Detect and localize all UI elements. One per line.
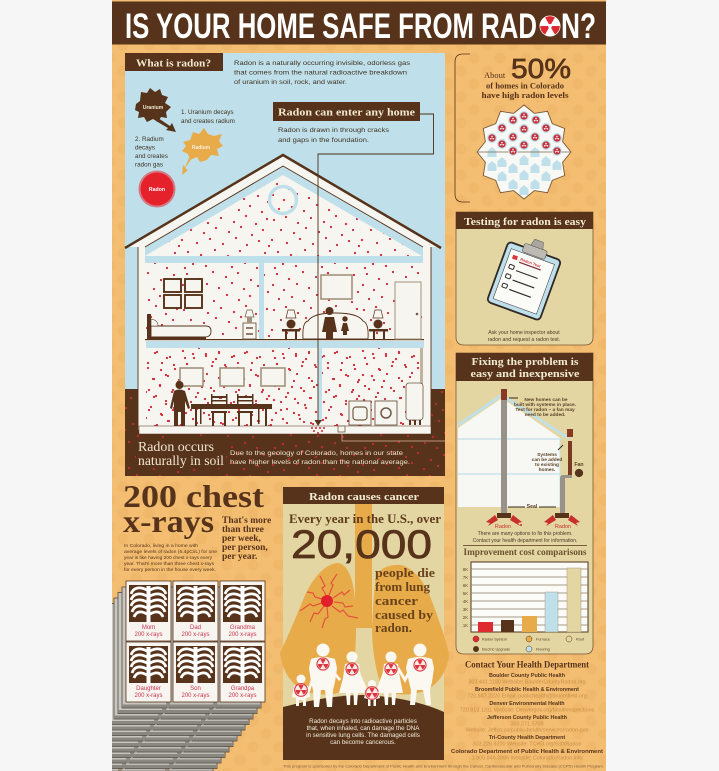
chart legend: Electric Upgrade [482, 648, 510, 652]
labels: can be added [532, 457, 562, 463]
labels: Test for radon – a fan may [515, 407, 575, 413]
stat: 50%: have high radon levels [482, 91, 568, 100]
text: per person: per week, [222, 534, 261, 544]
x-ray: grandma [220, 581, 265, 641]
contact directory [451, 660, 603, 762]
title banner: N? [561, 7, 596, 46]
labels: New homes can be [524, 397, 568, 403]
panel: what is radon and house [125, 53, 445, 476]
text: step two: 2. Radium [135, 136, 164, 143]
bar chart: improvement costs: 5K [463, 591, 468, 596]
x-ray stack [112, 586, 262, 771]
fan [574, 468, 584, 478]
checklist: Radon Test [519, 257, 542, 269]
contact list [451, 673, 603, 762]
person and dining table [170, 381, 272, 426]
x-ray: son: 200 x-rays [181, 693, 210, 699]
heading: cost comparisons: Improvement cost comparisons [464, 548, 587, 558]
callout: radon can enter any home [273, 102, 420, 144]
nightstand lamp [243, 310, 256, 339]
bar chart: improvement costs: 4K [463, 599, 468, 604]
icon: radium [182, 128, 223, 175]
lungs [280, 504, 449, 695]
roof line [125, 155, 441, 248]
house [125, 155, 445, 441]
labels: Seal [527, 504, 538, 510]
contact list: Boulder County Public Health [489, 673, 565, 679]
picture frames [164, 279, 202, 308]
x-ray: dad: Dad [190, 625, 201, 631]
figure: small child [364, 680, 380, 706]
text: x-ray explanation [124, 543, 217, 572]
text: step one [181, 109, 235, 125]
x-ray: son [173, 642, 218, 702]
contact list: Broomfield Public Health & Environment [475, 687, 579, 693]
icon: radon: Radon [149, 187, 165, 193]
text: how radon causes cancer: that, when inhaled, can damage the DNA [307, 725, 420, 732]
figure: grandfather [406, 644, 434, 705]
water heater [406, 348, 423, 425]
callout: radon can enter any home: and gaps in the foundation. [278, 137, 369, 144]
bar chart: improvement costs: 2K [463, 615, 468, 620]
text: how radon causes cancer: Radon decays into radioactive particles [309, 718, 417, 725]
text: radon definition: Radon is a naturally occurring invisible, odorless gas [234, 60, 410, 67]
text: people die: cancer [375, 594, 419, 608]
footings [497, 513, 569, 518]
heading: radon occurs naturally in soil [136, 438, 226, 469]
x-ray: grandpa: 200 x-rays [228, 693, 257, 699]
labels [514, 397, 584, 510]
text: per person: per person, [222, 543, 268, 553]
basement [146, 348, 423, 426]
text: x-ray explanation: for every person in the house every week. [124, 567, 216, 572]
text: x-ray explanation: year is like having 200 chest x-rays every [124, 555, 213, 560]
contact list: Denver Environmental Health [489, 701, 565, 707]
text: step two [135, 136, 168, 168]
x-ray: daughter [126, 642, 171, 702]
contact list: 303.271.5700 [511, 722, 543, 728]
foundation slab [139, 426, 445, 441]
x-ray: grandma: Grandma [230, 625, 256, 631]
text: per person: than three [222, 525, 264, 535]
icon: radium: Radium [192, 145, 211, 151]
x-ray: dad: 200 x-rays [181, 632, 210, 638]
vent pipes [501, 389, 573, 513]
panel: 50 percent of homes [455, 53, 571, 202]
contact list: Jefferson County Public Health [487, 715, 567, 721]
contact list: 1.800.846.3986 Website: Colorado.Radon.info [472, 756, 582, 762]
text: options [473, 531, 577, 544]
heading: contact: Contact Your Health Department [465, 660, 590, 670]
basement windows [180, 368, 285, 386]
bar chart: improvement costs: 1K [463, 623, 468, 628]
x-ray: grandpa [220, 642, 265, 702]
text: people die: caused by [375, 608, 434, 622]
icon: radon damage in lung [300, 574, 358, 628]
x-ray: grandpa: Grandpa [231, 686, 255, 692]
radon arrows: Radon [495, 524, 511, 530]
heading: 200 chest x-rays [123, 478, 264, 539]
icon: radon [138, 170, 176, 208]
x-ray: mom: Mom [142, 625, 155, 631]
panel: 200 chest x-rays [112, 485, 271, 771]
labels: Fan [574, 462, 584, 468]
title banner: IS YOUR HOME SAFE FROM RAD [125, 7, 537, 46]
poster background [112, 0, 606, 771]
radon arrows: Radon [555, 524, 571, 530]
chart legend: Roof [576, 638, 585, 642]
text: per person: That's more [222, 516, 271, 526]
text: per person [222, 516, 271, 562]
base soil [283, 695, 444, 760]
icon: uranium [135, 88, 176, 132]
bracket [455, 54, 470, 202]
stat: 50%: About [484, 70, 506, 80]
labels: to existing [535, 462, 559, 468]
x-ray: daughter: Daughter [136, 686, 161, 692]
text: x-ray explanation: year. That's more than three chest x-rays [124, 561, 215, 566]
text: ask your inspector [488, 330, 560, 343]
soil [125, 389, 445, 476]
heading: testing: Testing for radon is easy [464, 217, 587, 228]
text: people die: from lung [375, 580, 431, 594]
chart legend: Radon System [482, 638, 507, 642]
chart legend: Flooring [536, 648, 550, 652]
heading: what is radon: What is radon? [136, 58, 211, 70]
diagram: mitigation house [458, 389, 584, 530]
x-ray: mom: 200 x-rays [134, 632, 163, 638]
text: ask your inspector: Ask your home inspector about [488, 330, 560, 336]
text: step two: decays [135, 144, 155, 152]
bar chart: improvement costs: 6K [463, 583, 468, 588]
contact list: Website: Jeffco.us/public-health/services/radon-gas [466, 728, 589, 734]
heading: 200 chest x-rays: x-rays [123, 503, 214, 539]
heading: radon causes cancer: Radon causes cancer [309, 491, 419, 503]
text: colorado geology: have higher levels of radon than the national average. [230, 459, 410, 466]
text: radon definition: that comes from the natural radioactive breakdown [234, 70, 408, 76]
text: how radon causes cancer: can become cancerous. [330, 739, 396, 746]
text: step two: and creates [135, 153, 168, 160]
contact list: 720.887.2220 Email: publichealth@broomfield.org [467, 694, 587, 700]
chart: homes seal [477, 105, 571, 199]
x-ray: daughter: 200 x-rays [134, 693, 163, 699]
figure: grandmother [378, 652, 403, 705]
picture above sofa [321, 275, 352, 299]
figure: father [309, 644, 337, 707]
stat: 50%: 50% [511, 53, 571, 84]
x-ray: mom [126, 581, 171, 641]
heading: radon causes cancer [283, 487, 444, 504]
arrow: entry path [314, 114, 434, 426]
text: people die [375, 566, 435, 635]
heading: fixing: easy and inexpensive [470, 368, 580, 380]
family [292, 644, 434, 707]
contact list: 303.441.1180 Website: BoulderCountyRadon.org [468, 680, 586, 686]
text: step one: and creates radium [181, 118, 235, 125]
text: ask your inspector: radon and request a radon test. [488, 337, 560, 343]
bar chart: improvement costs: 8K [463, 567, 468, 572]
contact list: Colorado Department of Public Health & Environment [451, 749, 603, 755]
upper floor rooms [145, 263, 424, 348]
text: step one: 1. Uranium decays [181, 109, 234, 116]
figure: child [292, 674, 310, 706]
bar chart: improvement costs: 3K [463, 607, 468, 612]
x-ray: grandma: 200 x-rays [228, 632, 257, 638]
panel: radon causes cancer [280, 487, 449, 760]
heading: fixing: Fixing the problem is [472, 356, 579, 368]
panel: fixing the problem [456, 353, 593, 654]
footnote: This program is sponsored by the Colorado Department of Public Health and Environment through the Cancer, Cardiovascular and Pulmonary Disease (CCPD) Health Program. [283, 764, 604, 768]
text: how radon causes cancer: in sensitive lung cells. The damaged cells [306, 732, 420, 739]
chart legend [473, 636, 585, 652]
text: options: Contact your health department for information. [473, 538, 577, 544]
stat: 50%: of homes in Colorado [486, 82, 564, 90]
bar chart: improvement costs: 7K [463, 575, 468, 580]
text: per person: per year. [222, 552, 257, 562]
side table lamps [282, 310, 388, 339]
text: radon definition: of uranium in soil, rock, and water. [234, 79, 347, 86]
text: x-ray explanation: average levels of radon (6.4pCi/L) for one [124, 549, 217, 554]
text: how radon causes cancer [306, 718, 420, 746]
text: options: There are many options to fix this problem. [478, 531, 572, 537]
text: colorado geology: Due to the geology of Colorado, homes in our state [230, 450, 404, 457]
labels: built with systems in place. [514, 402, 576, 408]
labels: Systems [537, 452, 557, 458]
sofa with people [303, 307, 368, 339]
text: every year: Every year in the U.S., over [289, 512, 441, 526]
stat: 50% [482, 53, 571, 100]
bar chart: improvement costs [463, 562, 588, 632]
text: people die: people die [375, 566, 435, 580]
panel: testing for radon [456, 212, 593, 345]
contact list: Tri-County Health Department [489, 735, 565, 741]
infographic poster [112, 0, 606, 771]
washer and dryer [349, 401, 397, 425]
icon: uranium: Uranium [143, 105, 164, 111]
callout: radon can enter any home: Radon is drawn in through cracks [278, 127, 389, 134]
contact list: 720.913.1311 Website: Denvergov.org/healthinspections [460, 708, 595, 714]
bed [147, 314, 211, 339]
labels: homes. [539, 467, 555, 473]
x-ray: dad [173, 581, 218, 641]
stat: 20,000: 20,000 [291, 523, 432, 567]
text: colorado geology [230, 450, 410, 466]
attic with radon [145, 175, 422, 256]
radon arrows [486, 515, 580, 530]
chart legend: Furnace [536, 638, 550, 642]
heading: fixing [456, 353, 593, 381]
heading: radon occurs naturally in soil: Radon occurs [138, 440, 214, 455]
callout: radon can enter any home: Radon can enter any home [278, 106, 415, 118]
heading: what is radon [125, 53, 223, 71]
text: people die: radon. [375, 621, 412, 635]
contact list: 303.220.9200 Website: TCHD.org/630/Radon [473, 742, 581, 748]
heading: radon occurs naturally in soil: naturally in soil [138, 454, 224, 469]
figure: mother [339, 652, 365, 705]
x-ray: son: Son [190, 686, 201, 692]
door [395, 282, 421, 339]
labels: need to be added. [525, 412, 565, 418]
text: radon definition [234, 60, 410, 86]
text: step two: radon gas [135, 162, 163, 168]
heading: 200 chest x-rays: 200 chest [123, 478, 264, 514]
text: x-ray explanation: In Colorado, living in a home with [124, 543, 198, 548]
